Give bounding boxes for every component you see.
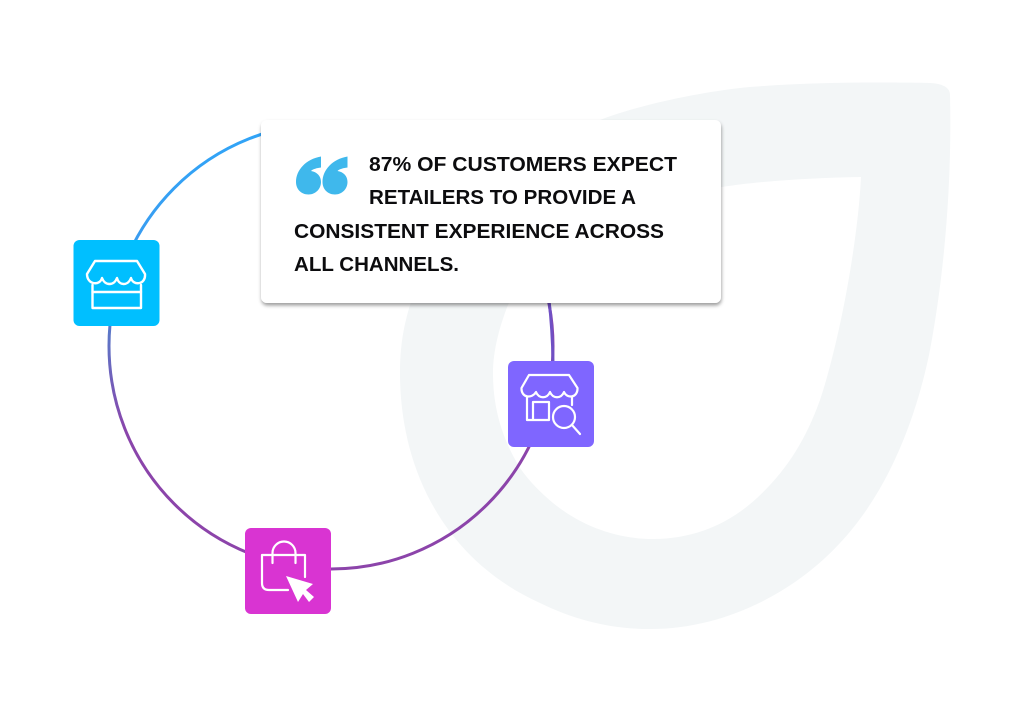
cursor arrow: [286, 576, 314, 602]
quote text: RETAILERS TO PROVIDE A: [369, 186, 636, 209]
quote text: CONSISTENT EXPERIENCE ACROSS: [294, 220, 664, 243]
icon: physical store: [74, 240, 160, 326]
icon: store search: [508, 361, 594, 447]
quote text: ALL CHANNELS.: [294, 253, 459, 276]
quote card: [261, 120, 721, 303]
quote text: [294, 153, 677, 276]
ring connector: [109, 123, 553, 569]
icon: online shopping bag with cursor: [245, 528, 331, 614]
icon: quotation mark: [296, 156, 348, 194]
quote text: 87% OF CUSTOMERS EXPECT: [369, 153, 677, 176]
background leaf shape: [400, 83, 950, 629]
